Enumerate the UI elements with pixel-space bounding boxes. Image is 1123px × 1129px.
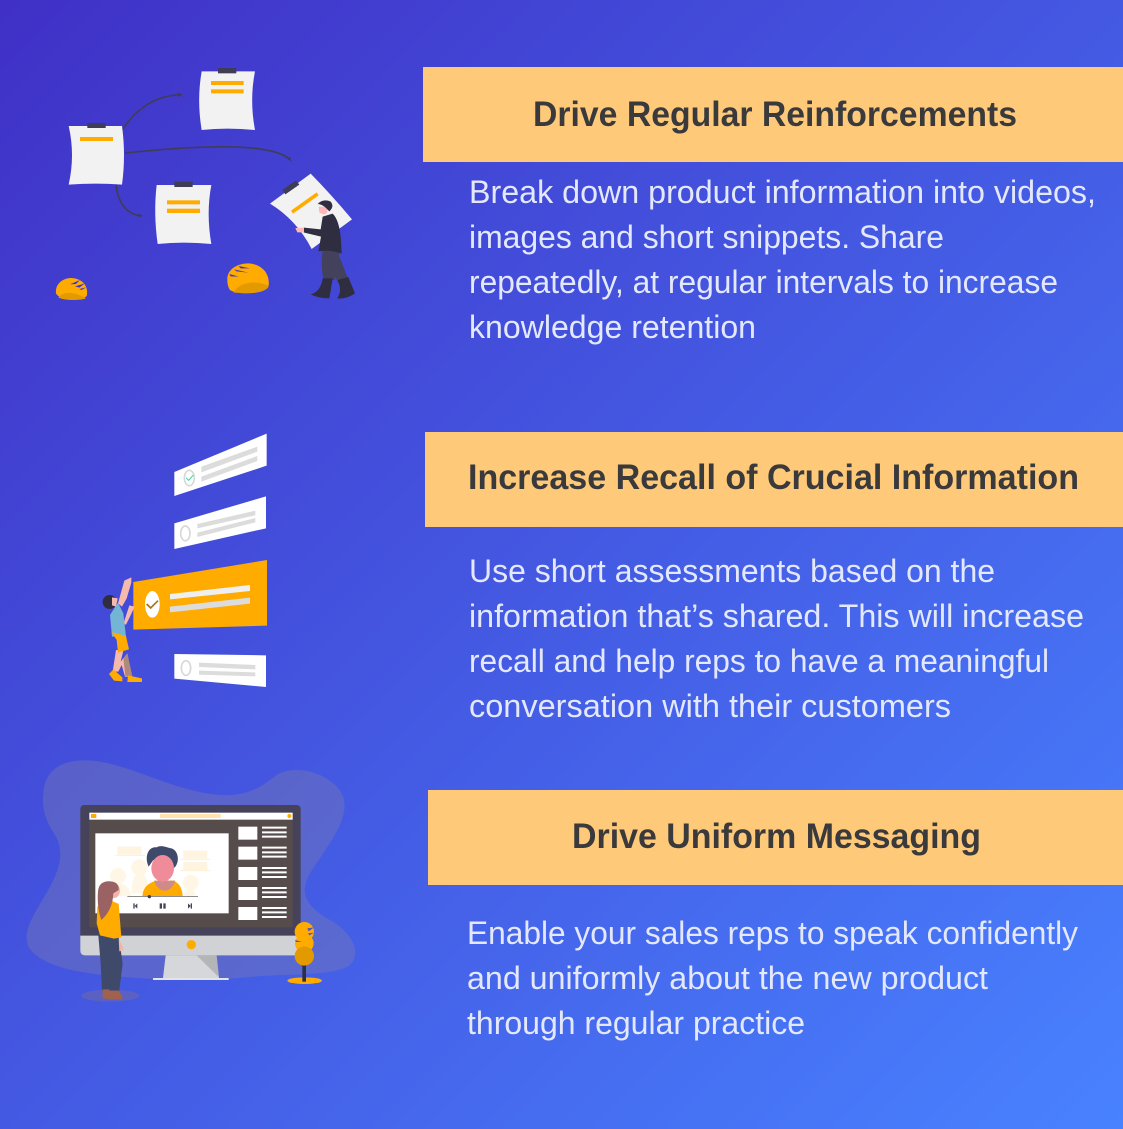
note: top: [199, 68, 255, 130]
heading bar 2: [425, 432, 1123, 527]
text block 1: Break down product information into videos,: [469, 174, 1096, 210]
text block 1: knowledge retention: [469, 309, 756, 345]
text block 3: Enable your sales reps to speak confidently: [467, 915, 1078, 951]
text block 2: [469, 553, 1084, 724]
card: empty upper: [174, 496, 266, 549]
heading bar 1: Drive Regular Reinforcements: [533, 95, 1017, 134]
monitor: [80, 805, 301, 980]
heading bar 2: Increase Recall of Crucial Information: [468, 458, 1079, 497]
illustration: notes and man carrying a note: [56, 68, 355, 300]
text block 1: [469, 174, 1096, 345]
text block 3: and uniformly about the new product: [467, 960, 988, 996]
card: highlighted orange: [133, 560, 267, 630]
note: lower: [155, 182, 211, 244]
text block 2: recall and help reps to have a meaningful: [469, 643, 1049, 679]
heading bar 1: [423, 67, 1123, 162]
card: checked green: [174, 434, 267, 496]
text block 2: information that’s shared. This will increase: [469, 598, 1084, 634]
text block 3: through regular practice: [467, 1005, 805, 1041]
bread shape: small: [56, 278, 87, 300]
text block 2: Use short assessments based on the: [469, 553, 995, 589]
text block 1: repeatedly, at regular intervals to increase: [469, 264, 1058, 300]
playlist: [238, 827, 287, 920]
woman: [81, 881, 139, 1002]
text block 3: [467, 915, 1078, 1041]
video player: [95, 833, 229, 913]
illustration: desktop video lesson: [27, 760, 355, 1002]
text block 2: conversation with their customers: [469, 688, 951, 724]
arrow: to top note: [123, 93, 183, 129]
plant: [287, 922, 322, 984]
note: carried: [270, 174, 352, 249]
heading bar 3: [428, 790, 1123, 885]
arrow: to man: [125, 147, 292, 161]
background blob: [27, 760, 355, 980]
arrow: to lower note: [116, 185, 143, 218]
note: left: [69, 123, 124, 185]
illustration: quiz cards and child: [103, 434, 267, 687]
card: empty lower: [174, 654, 266, 687]
bread shape: large: [227, 263, 269, 293]
heading bar 3: Drive Uniform Messaging: [572, 817, 981, 856]
text block 1: images and short snippets. Share: [469, 219, 944, 255]
child: [103, 577, 142, 682]
man: [295, 200, 355, 298]
